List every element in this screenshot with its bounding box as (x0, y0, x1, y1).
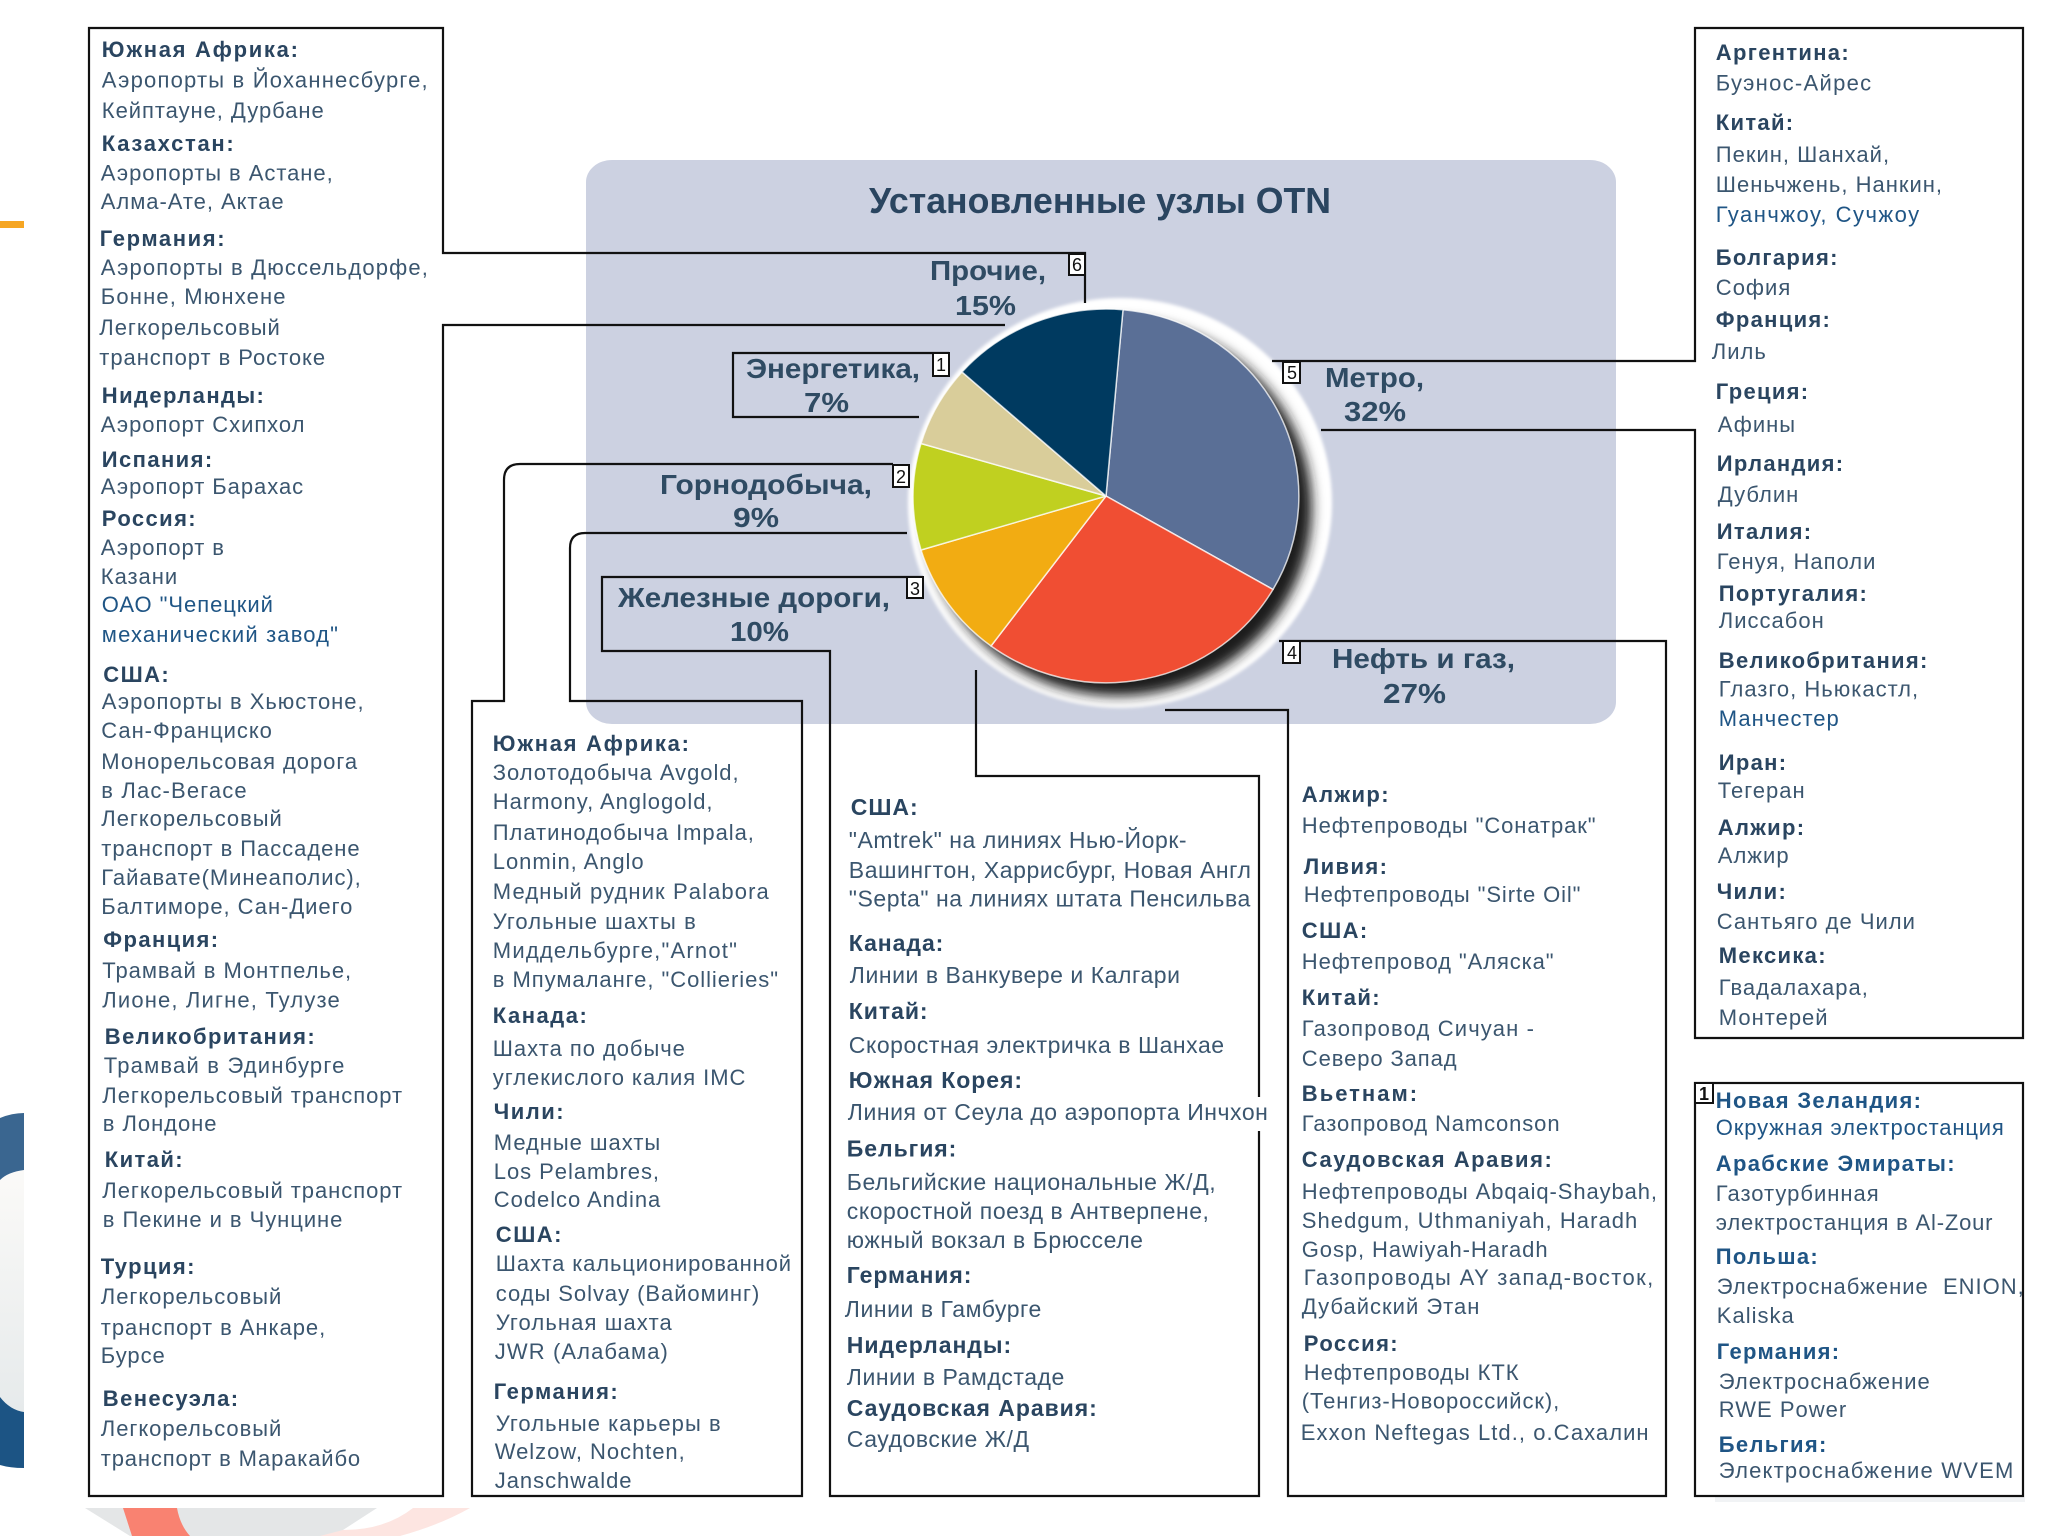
label: Горнодобыча 9% (660, 469, 872, 533)
Саудовская Аравия: Саудовская Аравия: (1302, 1147, 1553, 1172)
Южная Африка: Золотодобыча Avgold, (493, 760, 740, 785)
Германия (494, 1379, 722, 1493)
white gap in frame (1255, 1097, 1263, 1131)
slice: Горнодобыча 9% (913, 444, 1106, 550)
Китай (102, 1147, 403, 1232)
Вьетнам (1302, 1081, 1560, 1136)
США: Гайавате(Минеаполис), (101, 865, 362, 890)
Канада: Канада: (849, 930, 944, 956)
Мексика: Мексика: (1719, 943, 1827, 968)
Германия: Линии в Гамбурге (845, 1296, 1042, 1322)
Алжир: Нефтепроводы "Сонатрак" (1302, 813, 1596, 838)
Польша: Польша: (1716, 1244, 1819, 1269)
Саудовская Аравия: Саудовские Ж/Д (847, 1426, 1030, 1452)
Иран (1718, 750, 1806, 803)
Венесуэла: Легкорельсовый (101, 1416, 282, 1441)
Южная Африка: Южная Африка: (102, 37, 300, 62)
Великобритания: Легкорельсовый транспорт (102, 1083, 403, 1108)
decorative logo fragment: bottom (85, 1508, 470, 1536)
Алжир: Алжир: (1302, 782, 1390, 807)
Китай: в Пекине и в Чунцине (103, 1207, 343, 1232)
slice: Энергетика 7% (921, 372, 1106, 496)
decorative logo fragment: left (0, 1113, 24, 1468)
frame and connector 6 (89, 28, 1085, 1496)
Канада (493, 1003, 746, 1090)
number box 5: 5 (1287, 363, 1297, 383)
number box 2 (893, 465, 909, 487)
Франция: Лиль (1712, 339, 1767, 364)
Россия: Аэропорт в (101, 535, 225, 560)
Великобритания: Глазго, Ньюкастл, (1719, 676, 1919, 701)
Великобритания: Великобритания: (105, 1024, 316, 1049)
Германия: Welzow, Nochten, (495, 1439, 686, 1464)
Канада (849, 930, 1181, 988)
panel: Прочие (6) (89, 28, 1085, 1496)
Новая Зеландия: Окружная электростанция (1716, 1115, 2005, 1140)
США (849, 794, 1252, 911)
Венесуэла: транспорт в Маракайбо (101, 1446, 361, 1471)
Бельгия (847, 1135, 1216, 1253)
Казахстан: Алма-Ате, Актае (101, 189, 285, 214)
США: Шахта кальционированной (496, 1251, 792, 1276)
Чили: Медные шахты (494, 1130, 661, 1155)
Алжир: Алжир (1718, 843, 1790, 868)
Иран: Иран: (1719, 750, 1787, 775)
Арабские Эмираты: Газотурбинная (1716, 1181, 1880, 1206)
США: Нефтепровод "Аляска" (1302, 949, 1555, 974)
label: Прочие 15%: 15% (955, 290, 1016, 321)
США: Балтиморе, Сан-Диего (101, 894, 353, 919)
Португалия (1719, 581, 1868, 633)
Канада: углекислого калия IMC (493, 1065, 746, 1090)
Ирландия (1717, 451, 1844, 507)
Аргентина: Аргентина: (1716, 40, 1850, 65)
Южная Африка: в Мпумаланге, "Collieries" (493, 967, 779, 992)
label: Метро 32%: Метро, (1325, 362, 1424, 393)
США: JWR (Алабама) (495, 1339, 669, 1364)
panel: Горнодобыча (2) (472, 464, 909, 1496)
Россия: ОАО "Чепецкий (102, 592, 274, 617)
label: Горнодобыча 9%: 9% (733, 502, 779, 533)
number box 2: 2 (896, 467, 906, 487)
Чили: Сантьяго де Чили (1717, 909, 1916, 934)
Саудовская Аравия: Shedgum, Uthmaniyah, Haradh (1302, 1208, 1638, 1233)
Саудовская Аравия (847, 1395, 1098, 1452)
Канада: Линии в Ванкувере и Калгари (850, 962, 1181, 988)
Германия (99, 226, 429, 370)
Южная Африка: Платинодобыча Impala, (493, 820, 755, 845)
Германия: Аэропорты в Дюссельдорфе, (101, 255, 429, 280)
Великобритания (1719, 648, 1929, 731)
Россия: Нефтепроводы КТК (1304, 1360, 1519, 1385)
Саудовская Аравия: Нефтепроводы Abqaiq-Shaybah, (1302, 1179, 1658, 1204)
Чили: Чили: (494, 1099, 565, 1124)
Южная Африка: Миддельбурге,"Arnot" (493, 938, 738, 963)
Китай: Китай: (1716, 110, 1794, 135)
Аргентина: Буэнос-Айрес (1716, 70, 1872, 95)
label: Метро 32% (1325, 362, 1424, 427)
number box 1: 1 (1699, 1084, 1709, 1104)
number box 6: 6 (1072, 255, 1082, 275)
Китай: Легкорельсовый транспорт (102, 1178, 403, 1203)
Арабские Эмираты (1716, 1151, 1993, 1235)
number box 3 (907, 577, 923, 599)
Чили (494, 1099, 661, 1212)
США: Вашингтон, Харрисбург, Новая Англ (849, 857, 1252, 883)
Южная Африка (102, 37, 429, 123)
Китай: Гуанчжоу, Сучжоу (1716, 202, 1921, 227)
frame and connector 5 (1272, 28, 2023, 1038)
slice: Прочие 15% (962, 309, 1123, 496)
Казахстан: Казахстан: (102, 131, 235, 156)
label: Нефть и газ 27%: Нефть и газ, (1332, 643, 1515, 674)
Саудовская Аравия (1302, 1147, 1658, 1319)
label: Железные дороги 10% (617, 582, 890, 647)
Китай: Газопровод Сичуан - (1302, 1016, 1535, 1041)
Россия: Exxon Neftegas Ltd., о.Сахалин (1301, 1420, 1650, 1445)
frame and connector 4 (1165, 641, 1666, 1496)
Мексика: Гвадалахара, (1719, 975, 1869, 1000)
Саудовская Аравия: Gosp, Hawiyah-Haradh (1302, 1237, 1548, 1262)
США: США: (851, 794, 919, 820)
Южная Африка: Аэропорты в Йоханнесбурге, (102, 67, 429, 92)
Франция: Трамвай в Монтпелье, (102, 958, 352, 983)
number box 4: 4 (1287, 643, 1297, 663)
Новая Зеландия (1716, 1088, 2005, 1140)
Казахстан: Аэропорты в Астане, (101, 160, 334, 185)
Китай: Северо Запад (1302, 1046, 1458, 1071)
Болгария (1716, 245, 1839, 300)
Великобритания: в Лондоне (103, 1111, 217, 1136)
США: США: (103, 662, 170, 687)
label: Нефть и газ 27%: 27% (1383, 678, 1446, 709)
Россия: Россия: (102, 506, 197, 531)
Турция (101, 1254, 326, 1368)
Испания: Аэропорт Барахас (101, 474, 304, 499)
panel: Энергетика connector (1): 1 (936, 355, 946, 375)
panel: Железные дороги (3) (602, 577, 1268, 1496)
panel: Метро (5) (1272, 28, 2023, 1038)
Нидерланды: Нидерланды: (102, 383, 265, 408)
Южная Африка: Южная Африка: (493, 731, 691, 756)
Германия: Электроснабжение (1719, 1369, 1931, 1394)
number box 3: 3 (910, 579, 920, 599)
Германия: Германия: (100, 226, 226, 251)
США (495, 1222, 792, 1364)
Франция (102, 927, 352, 1012)
Польша: Kaliska (1717, 1303, 1795, 1328)
label: Энергетика 7%: 7% (804, 387, 849, 418)
label: Прочие 15%: Прочие, (930, 255, 1046, 286)
number box 1 (1695, 1083, 1713, 1104)
Болгария: София (1716, 275, 1791, 300)
Нидерланды (101, 383, 305, 437)
Ливия: Нефтепроводы "Sirte Oil" (1304, 882, 1581, 907)
Великобритания: Манчестер (1719, 706, 1840, 731)
Болгария: Болгария: (1716, 245, 1839, 270)
Китай: Китай: (1302, 985, 1381, 1010)
Арабские Эмираты: электростанция в Al-Zour (1716, 1210, 1993, 1235)
Чили: Codelco Andina (494, 1187, 661, 1212)
США: Аэропорты в Хьюстоне, (102, 689, 365, 714)
Германия: Угольные карьеры в (496, 1411, 722, 1436)
Россия: (Тенгиз-Новороссийск), (1302, 1388, 1560, 1413)
Бельгия: Бельгия: (847, 1135, 957, 1161)
Южная Африка: Угольные шахты в (493, 909, 697, 934)
Италия: Италия: (1717, 519, 1812, 544)
slice: Железные дороги 10% (921, 496, 1106, 646)
США (1302, 918, 1555, 974)
Нидерланды: Нидерланды: (847, 1332, 1012, 1358)
США: в Лас-Вегасе (101, 778, 248, 803)
Южная Африка: Медный рудник Palabora (493, 879, 770, 904)
Китай (1716, 110, 1943, 227)
Германия: Janschwalde (495, 1468, 632, 1493)
label: Железные дороги 10%: Железные дороги, (617, 582, 890, 613)
Бельгия: Электроснабжение WVEM (1719, 1458, 2015, 1483)
Саудовская Аравия: Газопроводы AY запад-восток, (1304, 1265, 1655, 1290)
Новая Зеландия: Новая Зеландия: (1716, 1088, 1922, 1113)
Арабские Эмираты: Арабские Эмираты: (1716, 1151, 1956, 1176)
Венесуэла (101, 1386, 361, 1471)
Бельгия: скоростной поезд в Антверпене, (847, 1198, 1210, 1224)
Вьетнам: Вьетнам: (1302, 1081, 1419, 1106)
Чили: Los Pelambres, (494, 1159, 660, 1184)
Канада: Канада: (493, 1003, 588, 1028)
Португалия: Лиссабон (1719, 608, 1825, 633)
Южная Африка: Harmony, Anglogold, (493, 789, 713, 814)
Испания: Испания: (102, 447, 214, 472)
Германия: RWE Power (1719, 1397, 1847, 1422)
Алжир (1718, 815, 1805, 868)
panel: Нефть и газ (4) (1165, 641, 1666, 1496)
Канада: Шахта по добыче (493, 1036, 686, 1061)
Германия: Легкорельсовый (99, 315, 281, 340)
Чили (1717, 879, 1916, 934)
Италия (1717, 519, 1876, 574)
number box 4 (1283, 641, 1300, 663)
Вьетнам: Газопровод Namconson (1302, 1111, 1560, 1136)
Испания (101, 447, 304, 499)
Китай: Пекин, Шанхай, (1716, 142, 1890, 167)
Алжир (1302, 782, 1596, 838)
США: Монорельсовая дорога (101, 749, 358, 774)
США: транспорт в Пассадене (101, 836, 361, 861)
frame (1695, 1083, 2023, 1496)
Турция: транспорт в Анкаре, (101, 1315, 326, 1340)
Южная Африка: Кейптауне, Дурбане (102, 98, 325, 123)
Франция: Франция: (1716, 307, 1831, 332)
США: "Amtrek" на линиях Нью-Йорк- (849, 826, 1187, 853)
panel: Энергетика connector (1) (733, 353, 949, 417)
Венесуэла: Венесуэла: (103, 1386, 239, 1411)
Саудовская Аравия: Саудовская Аравия: (847, 1395, 1098, 1421)
Россия (1301, 1331, 1650, 1445)
Греция: Греция: (1716, 379, 1809, 404)
Португалия: Португалия: (1719, 581, 1868, 606)
Великобритания: Трамвай в Эдинбурге (104, 1053, 346, 1078)
Аргентина (1716, 40, 1872, 95)
США: Легкорельсовый (101, 806, 283, 831)
Германия: Германия: (1717, 1339, 1840, 1364)
США: "Septa" на линиях штата Пенсильва (849, 885, 1251, 911)
decorative orange bar (0, 221, 24, 228)
Турция: Турция: (101, 1254, 196, 1279)
slice: Метро 32% (1106, 310, 1299, 590)
Чили: Чили: (1717, 879, 1787, 904)
Саудовская Аравия: Дубайский Этан (1302, 1294, 1480, 1319)
Нидерланды: Аэропорт Схипхол (101, 412, 305, 437)
label: Энергетика 7% (746, 353, 920, 418)
США: соды Solvay (Вайоминг) (496, 1281, 760, 1306)
Ливия: Ливия: (1304, 854, 1388, 879)
Южная Африка (493, 731, 779, 992)
Ливия (1304, 854, 1581, 907)
Турция: Бурсе (101, 1343, 166, 1368)
Германия: Бонне, Мюнхене (101, 284, 287, 309)
Франция: Лионе, Лигне, Тулузе (102, 987, 341, 1012)
number box 6 (1069, 254, 1085, 275)
frame and connector 3 (602, 577, 1259, 1496)
Польша: Электроснабжение ENION, (1717, 1274, 2025, 1299)
panel: Энергетика list (1) (1695, 1083, 2025, 1502)
label: Энергетика 7%: Энергетика, (746, 353, 920, 384)
Бельгия: Бельгийские национальные Ж/Д, (847, 1169, 1216, 1195)
Ирландия: Дублин (1718, 482, 1799, 507)
label: Прочие 15% (930, 255, 1046, 321)
Казахстан (101, 131, 334, 214)
label: Горнодобыча 9%: Горнодобыча, (660, 469, 872, 500)
США: Сан-Франциско (101, 718, 273, 743)
panel: chart background (586, 160, 1616, 724)
Россия: механический завод" (102, 622, 339, 647)
Германия: Германия: (847, 1262, 972, 1288)
Франция: Франция: (103, 927, 219, 952)
frame and connector 2 (472, 464, 907, 1496)
Франция (1712, 307, 1831, 364)
Бельгия: южный вокзал в Брюсселе (847, 1227, 1144, 1253)
Нидерланды (847, 1332, 1065, 1390)
Мексика (1719, 943, 1869, 1030)
Россия: Казани (101, 564, 178, 589)
Ирландия: Ирландия: (1717, 451, 1844, 476)
Великобритания: Великобритания: (1719, 648, 1929, 673)
Нидерланды: Линии в Рамдстаде (847, 1364, 1065, 1390)
Великобритания (102, 1024, 403, 1136)
США: США: (1302, 918, 1369, 943)
Южная Корея: Южная Корея: (849, 1067, 1023, 1093)
Китай (1302, 985, 1535, 1071)
Китай: Китай: (849, 998, 929, 1024)
США: США: (496, 1222, 563, 1247)
Алжир: Алжир: (1718, 815, 1805, 840)
label: Нефть и газ 27% (1332, 643, 1515, 709)
Италия: Генуя, Наполи (1717, 549, 1876, 574)
Германия (1717, 1339, 1931, 1422)
slice: Нефть и газ 27% (991, 496, 1273, 683)
label: Метро 32%: 32% (1344, 396, 1406, 427)
Китай (849, 998, 1225, 1058)
faint shadow below panel (1715, 1497, 2025, 1502)
США: Угольная шахта (496, 1310, 673, 1335)
Германия: Германия: (494, 1379, 619, 1404)
Бельгия (1719, 1432, 2015, 1483)
label: Железные дороги 10%: 10% (730, 616, 789, 647)
Китай: Скоростная электричка в Шанхае (849, 1032, 1225, 1058)
Россия (101, 506, 339, 647)
Иран: Тегеран (1718, 778, 1806, 803)
number box 5 (1283, 362, 1300, 383)
pie chart (908, 298, 1332, 708)
Мексика: Монтерей (1719, 1005, 1829, 1030)
Китай: Шеньчжень, Нанкин, (1716, 172, 1943, 197)
Южная Корея: Линия от Сеула до аэропорта Инчхон (848, 1099, 1268, 1125)
title: Установленные узлы OTN (869, 180, 1331, 221)
Германия (845, 1262, 1042, 1322)
Южная Корея (848, 1067, 1268, 1125)
Южная Африка: Lonmin, Anglo (493, 849, 645, 874)
Греция: Афины (1718, 412, 1796, 437)
США (101, 662, 365, 919)
Польша (1716, 1244, 2025, 1328)
Бельгия: Бельгия: (1719, 1432, 1828, 1457)
Россия: Россия: (1304, 1331, 1399, 1356)
Греция (1716, 379, 1809, 437)
Германия: транспорт в Ростоке (99, 345, 326, 370)
Китай: Китай: (105, 1147, 184, 1172)
Турция: Легкорельсовый (101, 1284, 282, 1309)
